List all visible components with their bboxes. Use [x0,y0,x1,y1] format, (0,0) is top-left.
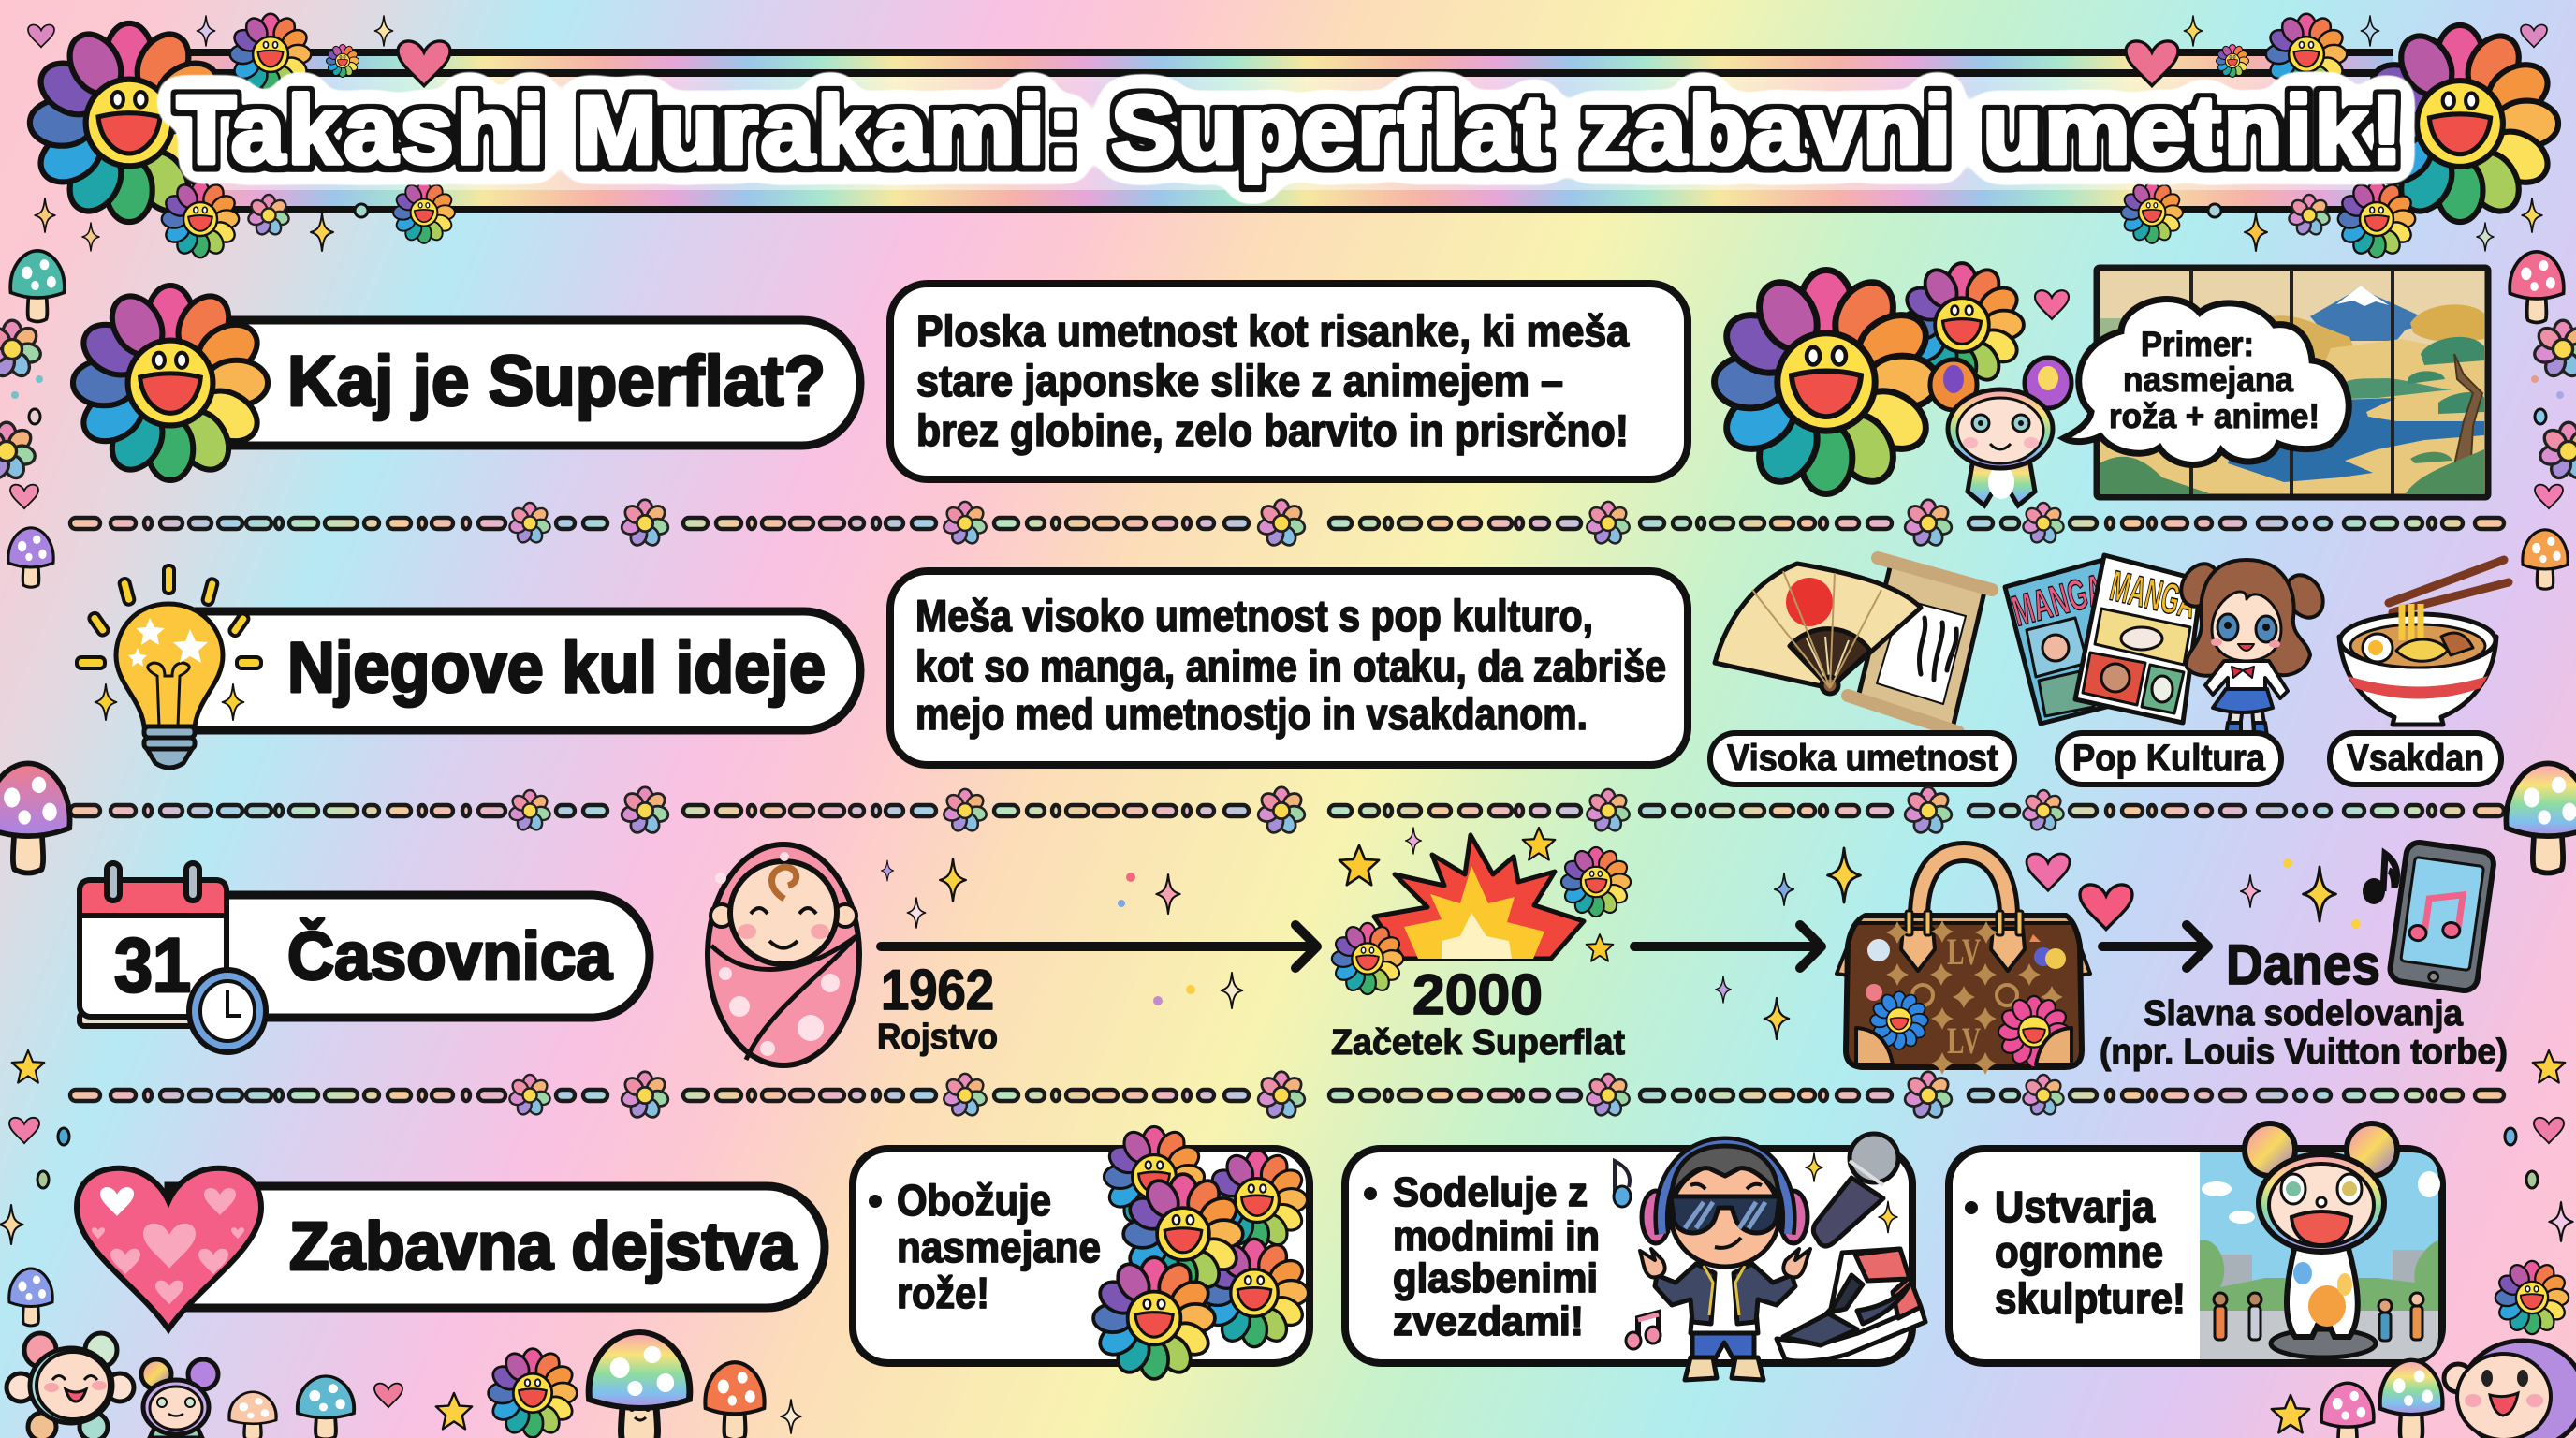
arrow: bag to today [2102,925,2208,968]
collab line 2: modnimi in [1393,1213,1600,1259]
character: bottom-left small mascot [141,1359,218,1438]
icon: music note [2363,854,2396,904]
icon: smartphone [2389,841,2496,992]
icon: manga magazines [2005,555,2202,724]
section 3 heading pill [206,895,650,1018]
section 1 heading text: Kaj je Superflat? [287,342,826,421]
divider 1 [70,500,2504,548]
today heading: Danes [2226,933,2380,996]
park scene with sculpture [2200,1152,2440,1359]
year 2000: 2000 [1412,963,1543,1026]
section 2 heading text: Njegove kul ideje [287,628,826,708]
icon: small flower behind [1900,263,2024,387]
icon: hearts near bag [2027,854,2132,930]
section 1 text box [890,284,1688,479]
year 1962: 1962 [881,959,994,1021]
title: Takashi Murakami: Superflat zabavni umetnik! [177,76,2403,183]
bubble line 2: nasmejana [2123,360,2293,399]
icon: light bulb [77,565,261,768]
icon: flower bouquet [1093,1126,1309,1379]
icon: swaddled baby [708,844,859,1065]
section 4 heading text: Zabavna dejstva [289,1210,797,1284]
painted screen illustration [2097,268,2488,497]
label: Rojstvo: Rojstvo [877,1018,998,1057]
icon: folding fan and scroll [1715,558,1992,732]
section 2 text box [890,571,1688,765]
arrow: 1962 to 2000 [881,925,1317,968]
fact box: sculptures [1949,1149,2442,1363]
speech bubble [2064,300,2349,464]
label: Pop Kultura: Pop Kultura [2072,738,2266,779]
bullet [1364,1187,1377,1200]
fact text line 3: rože! [897,1269,989,1317]
icon: pink heart [2035,290,2069,319]
decoration: right edge [2496,252,2576,1334]
definition line 1: Ploska umetnost kot risanke, ki meša [916,306,1630,356]
ideas line 1: Meša visoko umetnost s pop kulturo, [915,591,1593,640]
divider 2 [70,787,2504,835]
sculpture line 2: ogromne [1995,1227,2163,1276]
fact box: flowers [853,1149,1310,1363]
decoration: sparkles near bag [1716,848,1860,1039]
icon: ramen bowl [2339,560,2509,725]
fact box: collaborations [1345,1149,1912,1363]
section 1 heading pill [178,320,860,446]
decoration: title right cluster [2121,14,2558,257]
section 3 heading text: Časovnica [287,918,613,994]
monogram bottom: LV [1947,1020,1981,1062]
collab line 3: glasbenimi [1393,1255,1598,1301]
icon: calendar with clock [80,863,266,1052]
character: bottom-right mascot [2444,1341,2576,1438]
fact text line 1: Obožuje [897,1176,1051,1225]
collab line 1: Sodeluje z [1393,1169,1588,1215]
ideas line 3: mejo med umetnostjo in vsakdanom. [915,689,1588,739]
decoration: left edge [0,251,70,1326]
decoration: title left cluster [28,14,455,257]
section 4 heading pill [168,1186,825,1308]
sculpture line 1: Ustvarja [1995,1182,2155,1231]
icon: rainbow smiling flower [73,286,268,480]
label: Vsakdan: Vsakdan [2347,738,2484,779]
character: bottom-left large smiling mascot [7,1333,134,1438]
icon: big pink heart [77,1168,261,1329]
decoration: sparkles near phone [2241,858,2361,929]
icon: small music notes and sparkles [1614,1153,1897,1349]
divider 3 [70,1072,2504,1120]
definition line 2: stare japonske slike z animejem – [916,356,1563,405]
character: mascot [1930,358,2071,506]
character: anime girl [2174,557,2331,736]
today line 2: (npr. Louis Vuitton torbe) [2100,1033,2508,1072]
icon: large flower [1715,271,1938,493]
icon: explosion burst [1332,828,1631,994]
fact text line 2: nasmejane [897,1223,1101,1271]
monogram top: LV [1947,931,1981,973]
label: MANGA right: MANGA [2106,561,2201,627]
bubble line 1: Primer: [2141,325,2254,363]
calendar date: 31 [114,923,191,1008]
collab line 4: zvezdami! [1393,1299,1584,1344]
decoration: sparkles after baby [881,858,1242,1008]
label: MANGA left: MANGA [2007,565,2110,636]
decoration: bottom right mushrooms [2272,1360,2442,1438]
bubble line 3: roža + anime! [2109,397,2320,435]
definition line 3: brez globine, zelo barvito in prisrčno! [916,405,1629,455]
decoration: bottom mushrooms and flower [229,1332,801,1438]
bullet [1965,1201,1978,1214]
title banner stripes [184,49,2393,213]
character: man with headphones [1640,1144,1810,1380]
label: Začetek Superflat: Začetek Superflat [1331,1023,1625,1063]
section 2 heading pill [168,611,860,730]
sculpture head [2245,1123,2397,1252]
ideas line 2: kot so manga, anime in otaku, da zabriše [915,641,1666,691]
bullet [869,1195,882,1208]
icon: designer handbag [1837,852,2090,1075]
icon: sneaker [1777,1249,1925,1361]
icon: microphone [1813,1134,1898,1246]
today line 1: Slavna sodelovanja [2144,994,2464,1034]
label: Visoka umetnost: Visoka umetnost [1727,738,1998,779]
arrow: 2000 to bag [1634,925,1822,968]
sculpture line 3: skulpture! [1995,1274,2186,1323]
